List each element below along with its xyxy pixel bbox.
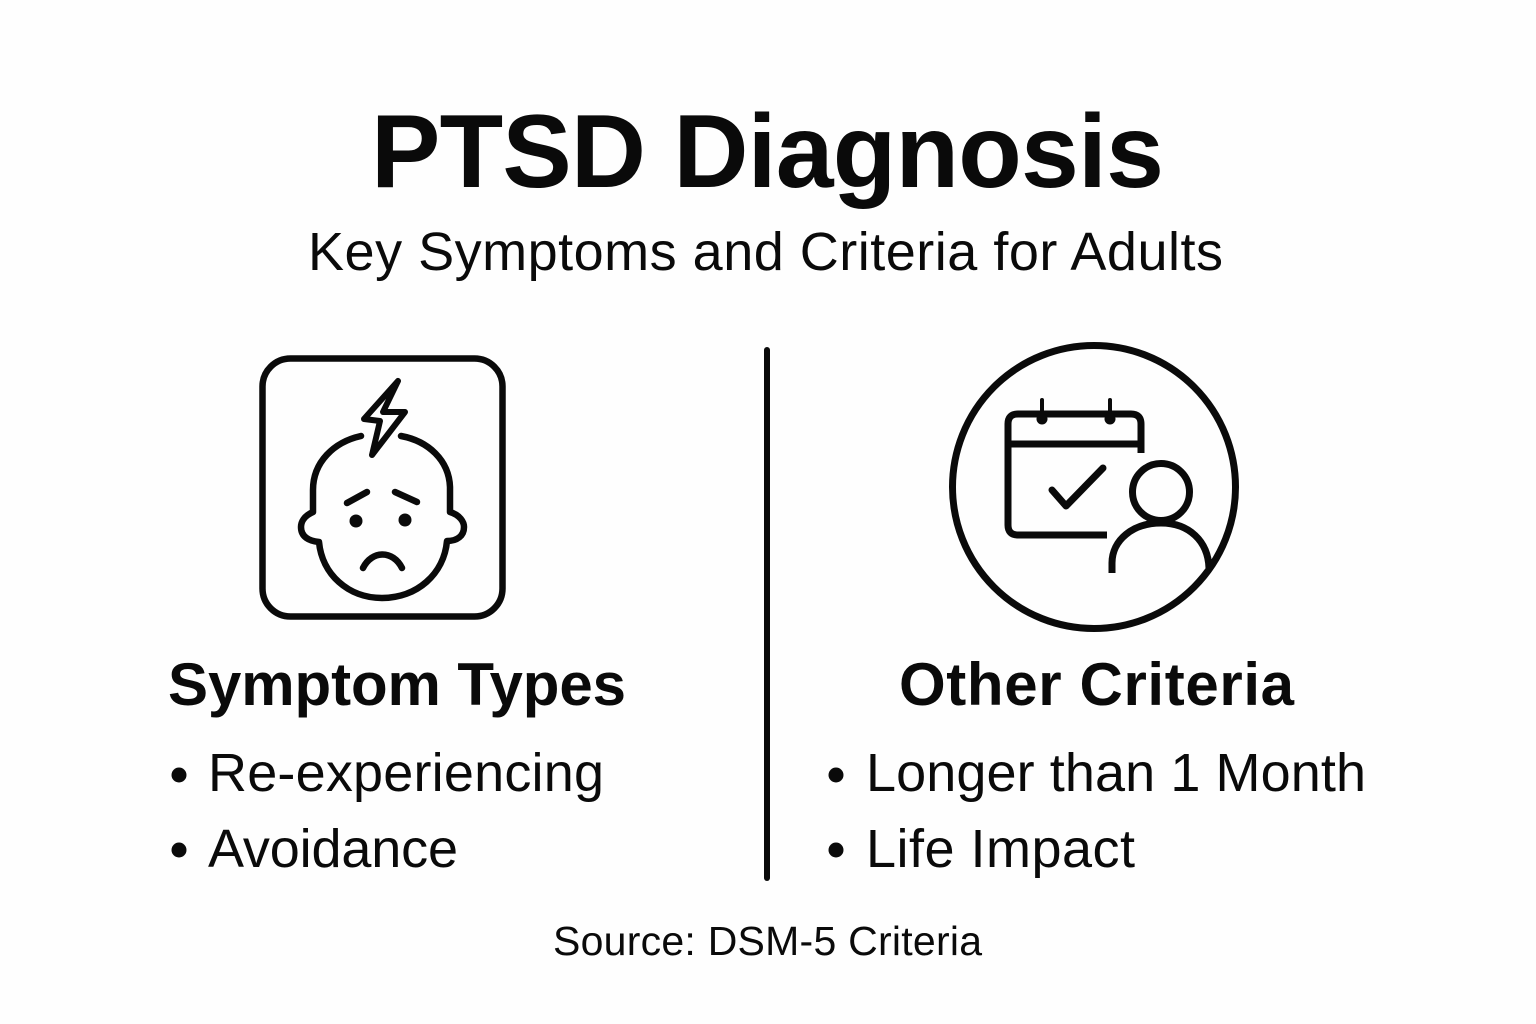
source note: Source: DSM-5 Criteria: [553, 918, 982, 964]
bullet list: other criteria: Life Impact: [866, 819, 1135, 879]
bullet list: other criteria: [828, 743, 1366, 879]
subtitle: Key Symptoms and Criteria for Adults: [308, 222, 1223, 282]
panel: symptom types: [168, 358, 626, 879]
divider: [764, 350, 770, 878]
icon: calendar with check and person: [952, 346, 1236, 628]
bullet list: symptom types: Avoidance: [208, 819, 458, 879]
bullet list: symptom types: [172, 743, 604, 879]
title: PTSD Diagnosis: [371, 94, 1164, 210]
bullet list: other criteria: Longer than 1 Month: [866, 743, 1366, 803]
heading: symptom types: Symptom Types: [168, 651, 626, 718]
icon: distressed head with lightning bolt: [262, 358, 502, 616]
heading: other criteria: Other Criteria: [899, 651, 1295, 718]
panel: other criteria: [828, 346, 1366, 879]
bullet list: symptom types: Re-experiencing: [208, 743, 604, 803]
